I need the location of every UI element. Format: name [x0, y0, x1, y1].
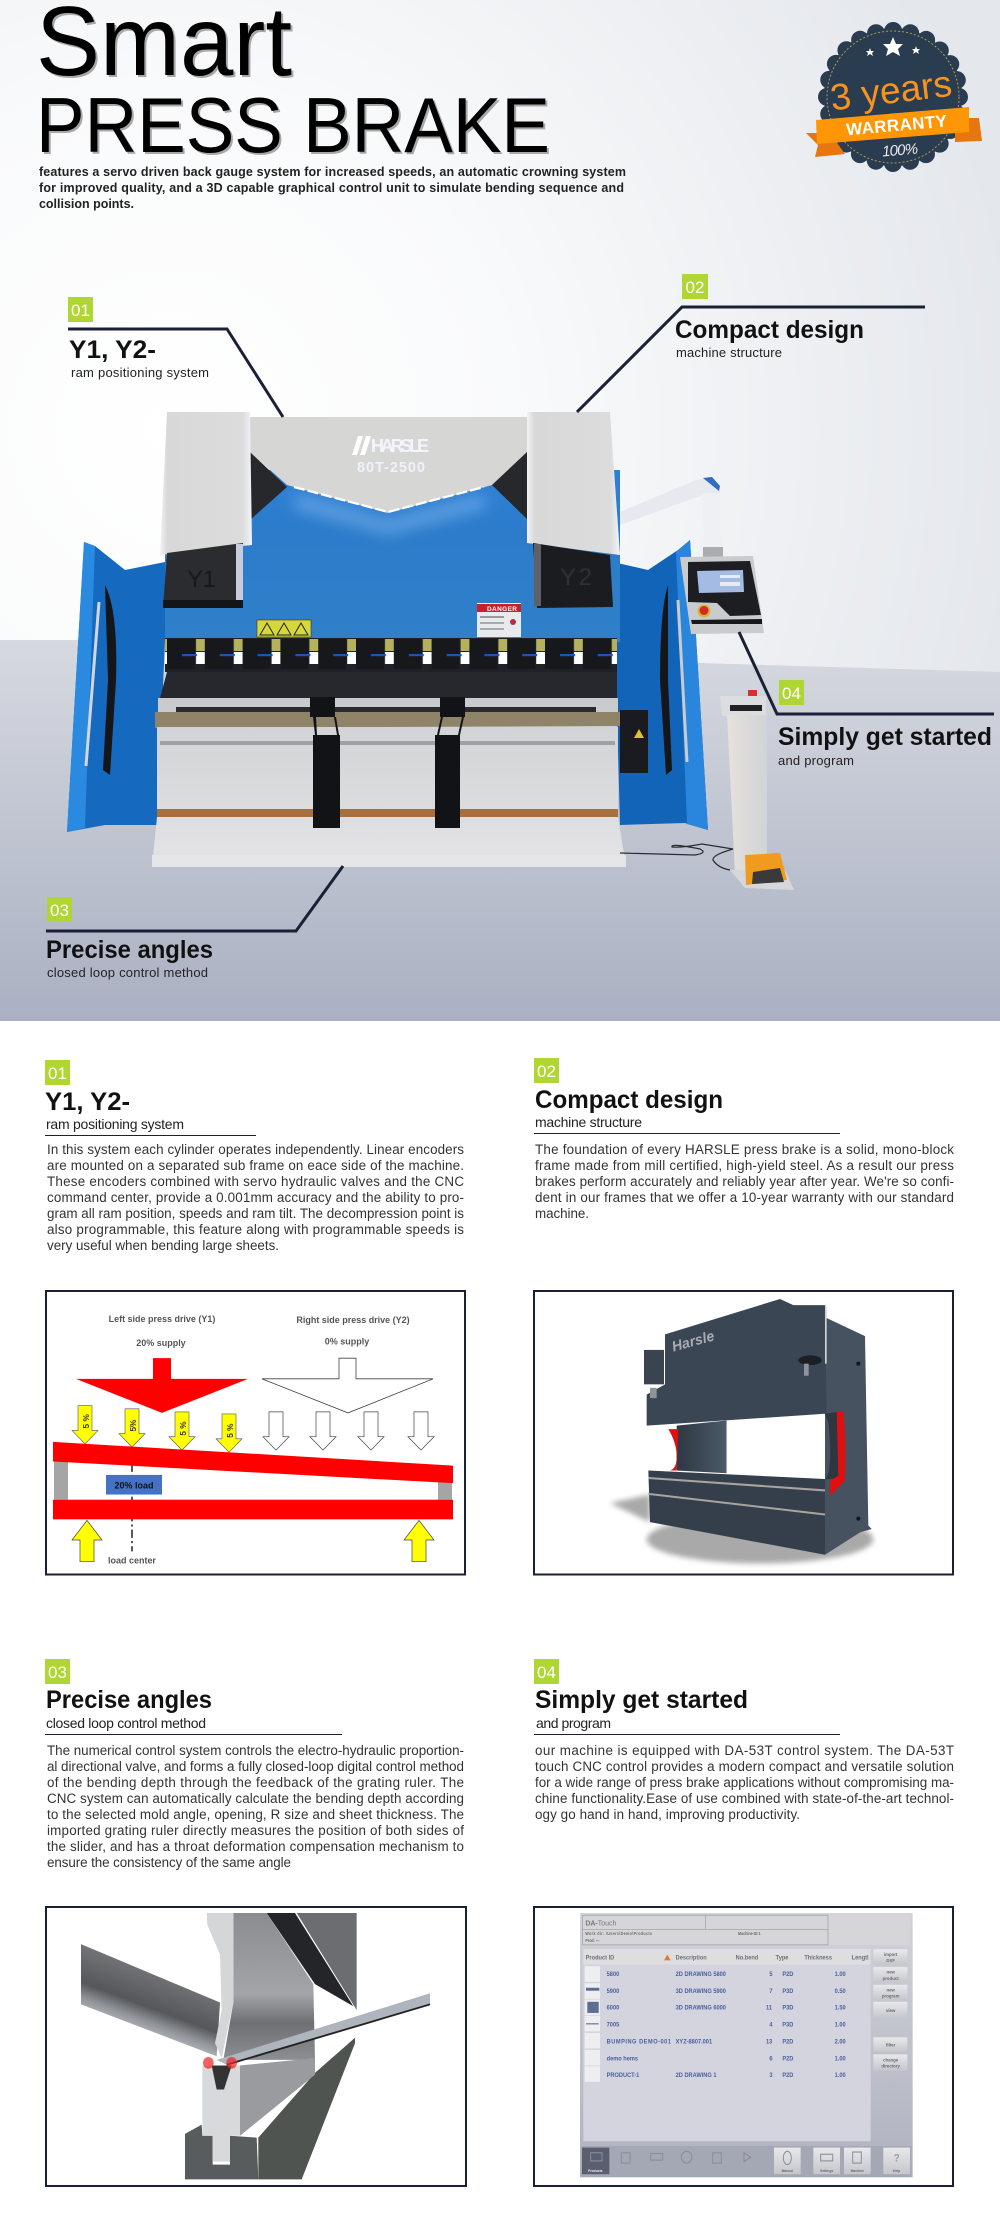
table rows: 6: [769, 2056, 773, 2062]
table rows: 0.50: [835, 1989, 846, 1995]
bottom tabs: Manual: [782, 2169, 793, 2173]
section body 04: for a wide range of press brake applications without compromising ma-: [535, 1775, 954, 1790]
section body 01: gram all ram position, speeds and ram tilt. The decompression point is: [47, 1206, 464, 1221]
section body 04: [535, 1743, 954, 1822]
screen header: Work dir: \Users\Demo\Products: [585, 1931, 652, 1936]
light edge: [825, 1305, 827, 1364]
section number 01: 01: [48, 1064, 67, 1083]
Y2 block: [533, 543, 613, 608]
section body 03: [47, 1743, 464, 1870]
pedal cable: [620, 844, 733, 870]
callout number 01: 01: [71, 301, 90, 320]
load tag: 20% load: [115, 1480, 153, 1490]
side plate: [825, 1317, 872, 1555]
section body 03: ensure the consistency of the same angle: [47, 1855, 291, 1870]
table rows: P2D: [782, 2073, 794, 2079]
callout line 01: [68, 329, 283, 417]
callout number 02: 02: [686, 278, 704, 297]
floor: [0, 640, 1000, 1021]
table rows: P3D: [782, 2005, 794, 2012]
screen body: [580, 1913, 913, 2177]
top beam: [250, 417, 528, 513]
table rows: demo hems: [607, 2056, 639, 2062]
table rows: 4: [769, 2022, 773, 2029]
table rows: 2D DRAWING 5800: [676, 1972, 727, 1978]
press brake machine: [67, 412, 794, 890]
clamp right: [435, 697, 465, 828]
percent labels: 5 %: [226, 1423, 235, 1438]
stop rod: [160, 741, 615, 745]
die notch: [212, 2065, 232, 2090]
intro text: [39, 165, 626, 211]
callout title 03: Precise angles: [46, 936, 213, 964]
callout line 03: [46, 866, 343, 931]
section number 03: 03: [48, 1663, 67, 1682]
lower red beam: [53, 1500, 453, 1519]
intro text: collision points.: [39, 197, 134, 211]
upper beam lower: [160, 672, 617, 698]
section body 01: [47, 1142, 464, 1253]
left column cover: [160, 412, 252, 555]
table rows: 13: [766, 2039, 773, 2045]
section subtitle 03: closed loop control method: [46, 1715, 206, 1731]
table rows: 7005: [607, 2022, 620, 2029]
danger sticker: DANGER: [487, 606, 517, 613]
table rows: 1.00: [835, 2022, 846, 2029]
white supply arrow: [262, 1358, 433, 1413]
side buttons: import: [884, 1952, 898, 1957]
picture: machine frame: [534, 1291, 953, 1574]
bottom tabs: Help: [893, 2169, 900, 2173]
table rows: 5900: [607, 1989, 620, 1995]
back plate: [297, 1913, 357, 2010]
callout title 04: Simply get started: [778, 723, 992, 751]
screen header: Machine ID:1: [738, 1931, 761, 1936]
silver rail: [158, 698, 618, 712]
holder side: [258, 2038, 355, 2179]
blue back panel: [165, 470, 620, 642]
section body 02: The foundation of every HARSLE press brake is a solid, mono-block: [535, 1142, 954, 1157]
Y1 block: Y1: [187, 566, 216, 593]
bottom tabs: Settings: [820, 2169, 833, 2173]
callout 03: [46, 866, 343, 980]
callout sub 01: ram positioning system: [71, 365, 209, 380]
table header: [583, 1949, 871, 1964]
LED strip: [294, 487, 484, 512]
section subtitle 01: ram positioning system: [46, 1116, 184, 1132]
section body 01: are mounted on a separated sub frame on eace side of the machine.: [47, 1158, 464, 1173]
table rows: 3D DRAWING 5900: [676, 1989, 727, 1995]
load tag: [106, 1475, 162, 1495]
table header: Thickness: [804, 1955, 833, 1961]
section body 02: [535, 1142, 954, 1221]
table rows: P2D: [782, 2039, 794, 2045]
table rows: 1.00: [835, 1972, 846, 1978]
right red edge: [830, 1412, 845, 1496]
side buttons: filter: [886, 2042, 896, 2048]
side buttons: [873, 1949, 907, 2071]
rear column: [677, 1421, 727, 1473]
beam logo: HARSLE: [371, 436, 429, 456]
section body 03: CNC system can automatically calculate the bending depth according: [47, 1791, 464, 1806]
side buttons: new: [886, 1987, 895, 1993]
table rows: [585, 1966, 846, 2082]
contact points: [203, 2057, 237, 2069]
table rows: P2D: [782, 2056, 794, 2062]
copper strip: [157, 809, 618, 817]
section body 02: brakes perform accurately and reliably year after year. We're so confi-: [535, 1174, 954, 1189]
table rows: 7: [769, 1989, 773, 1995]
table rows: BUMPING DEMO-001: [607, 2039, 672, 2045]
section subtitle 04: and program: [536, 1715, 611, 1731]
side buttons: program: [882, 1994, 899, 1999]
side buttons: new: [886, 1970, 895, 1975]
section body 01: command center, provide a 0.001mm accuracy and the ability to pro-: [47, 1190, 464, 1205]
percent labels: [82, 1413, 235, 1438]
callout sub 04: and program: [778, 753, 854, 768]
table header: Lengtl: [852, 1955, 869, 1961]
section body 04: chine functionality.Ease of use combined with state-of-the-art technol-: [535, 1791, 954, 1806]
ribbon: [816, 107, 969, 144]
section number 02: 02: [537, 1062, 556, 1081]
badge stars: [866, 37, 920, 56]
section body 02: machine.: [535, 1206, 589, 1221]
table rows: 11: [766, 2005, 773, 2012]
picture: bending tool: [46, 1907, 466, 2186]
Y2 block: Y2: [560, 564, 592, 591]
table rows: 1.50: [835, 2005, 846, 2012]
badge years text: 3 years: [828, 63, 954, 118]
section number 01: [45, 1060, 70, 1085]
bottom tabs: Machine: [851, 2169, 864, 2173]
callout 04: [739, 632, 994, 768]
drive labels: Left side press drive (Y1): [109, 1314, 215, 1324]
warning sticker: [257, 620, 311, 637]
callout sub 03: closed loop control method: [47, 965, 208, 980]
grey cylinders: [54, 1461, 452, 1500]
yellow load arrows: [72, 1406, 242, 1452]
callout title 01: Y1, Y2-: [69, 336, 156, 364]
section body 03: to the selected mold angle, opening, R size and sheet thickness. The: [47, 1807, 464, 1822]
punch side: [223, 1913, 315, 2060]
picture: control screen: [534, 1907, 953, 2186]
section subtitle 02: machine structure: [535, 1114, 642, 1130]
red supply arrow: [76, 1358, 248, 1413]
plate grooves: [648, 1478, 825, 1515]
side buttons: DXF: [886, 1958, 895, 1963]
main title: [36, 0, 550, 169]
section body 04: touch CNC control provides a modern compact and versatile solution: [535, 1759, 954, 1774]
callout number 02: [682, 274, 708, 299]
table rows: PRODUCT-1: [607, 2073, 640, 2079]
beam logo: [352, 436, 429, 476]
bottom tabs: [581, 2146, 911, 2177]
section title 03: Precise angles: [46, 1686, 212, 1714]
callout number 04: [779, 680, 804, 705]
section body 02: dent in our frames that we offer a 10-year warranty with our standard: [535, 1190, 954, 1205]
callout number 03: 03: [50, 901, 69, 920]
drive labels: 20% supply: [136, 1338, 187, 1348]
LED glow: [295, 496, 485, 532]
section body 03: al directional valve, and forms a fully closed-loop digital control method: [47, 1759, 464, 1774]
left cylinder: [644, 1350, 664, 1384]
table header: Description: [676, 1955, 707, 1961]
section body 01: In this system each cylinder operates independently. Linear encoders: [47, 1142, 464, 1157]
screen header: Prod: ---: [585, 1938, 600, 1943]
section body 03: the slider, and has a throat deformation compensation mechanism to: [47, 1839, 464, 1854]
Y1 block: [163, 543, 243, 608]
left sheet: [81, 1944, 220, 2056]
section number 03: [45, 1659, 70, 1684]
table rows: 5: [769, 1972, 773, 1978]
table rows: 3D DRAWING 6000: [676, 2005, 727, 2012]
load center label: load center: [108, 1556, 156, 1566]
foot pedestal: [720, 690, 794, 890]
table rows: 5800: [607, 1972, 620, 1978]
foot pedal: [745, 853, 787, 885]
badge seal: [824, 28, 962, 166]
section number 04: 04: [537, 1663, 556, 1682]
die side: [240, 2058, 315, 2136]
intro text: for improved quality, and a 3D capable graphical control unit to simulate bending sequence and: [39, 181, 624, 195]
section title 02: Compact design: [535, 1086, 723, 1114]
ribbon text: WARRANTY: [845, 112, 948, 139]
main title: PRESS BRAKE: [36, 81, 550, 169]
section 04: [534, 1659, 954, 2186]
section body 04: ogy go hand in hand, improving productivity.: [535, 1807, 800, 1822]
danger sticker: [477, 603, 521, 637]
section number 02: [534, 1058, 559, 1083]
diagram: press drive load: [46, 1291, 465, 1574]
drive labels: 0% supply: [325, 1337, 370, 1347]
table rows: 1.00: [835, 2056, 846, 2062]
load center line: [131, 1464, 133, 1551]
percent labels: 5%: [129, 1419, 138, 1432]
table rows: 2D DRAWING 1: [676, 2073, 717, 2079]
right door: [613, 540, 708, 830]
section body 01: also programmable, this feature along with programmable speeds is: [47, 1222, 464, 1237]
section body 03: imported grating ruler directly measures the position of both sides of: [47, 1823, 464, 1838]
white bed: [152, 727, 626, 867]
table header: No.bend: [736, 1955, 759, 1961]
punch front: [207, 1913, 233, 2058]
white load arrows: [263, 1412, 434, 1450]
drive labels: [109, 1314, 410, 1348]
callout number 01: [68, 297, 93, 322]
section 03: [45, 1659, 466, 2186]
section number 04: [534, 1659, 559, 1684]
die front: [202, 2065, 240, 2162]
section body 01: These encoders combined with servo hydraulic valves and the CNC: [47, 1174, 464, 1189]
percent labels: 5 %: [179, 1421, 188, 1436]
side buttons: directory: [881, 2063, 900, 2069]
throat opening: [727, 1414, 825, 1479]
side buttons: view: [886, 2008, 896, 2013]
side holes: [856, 1362, 860, 1521]
bed bottom highlight: [152, 855, 626, 867]
section body 02: frame made from mill certified, high-yield steel. As a result our press: [535, 1158, 954, 1173]
right sheet: [217, 1993, 430, 2065]
section body 03: of the bending depth through the feedback of the grating ruler. The: [47, 1775, 464, 1790]
holder front: [185, 2125, 258, 2179]
section body 01: very useful when bending large sheets.: [47, 1238, 279, 1253]
upper plate: [647, 1299, 827, 1426]
callout line 02: [577, 307, 925, 412]
callout number 04: 04: [782, 684, 801, 703]
table rows: 3: [769, 2073, 773, 2079]
section title 04: Simply get started: [535, 1686, 748, 1714]
table rows: P3D: [782, 1989, 794, 1995]
upper red beam: [53, 1442, 453, 1483]
table rows: XYZ-8807.001: [676, 2039, 713, 2045]
table rows: P2D: [782, 1972, 794, 1978]
section body 03: The numerical control system controls the electro-hydraulic proportion-: [47, 1743, 464, 1758]
plate logo: Harsle: [670, 1328, 716, 1356]
section body 04: our machine is equipped with DA-53T control system. The DA-53T: [535, 1743, 954, 1758]
table area: [583, 1949, 871, 2141]
beam logo: 80T-2500: [357, 460, 425, 476]
frame shadow: [610, 1495, 873, 1563]
dark wedges: [250, 452, 528, 520]
callout title 02: Compact design: [675, 316, 864, 344]
wall background: [0, 0, 1000, 1021]
screen header: [583, 1915, 910, 1945]
intro text: features a servo driven back gauge system for increased speeds, an automatic crowning system: [39, 165, 626, 179]
table header: Product ID: [586, 1955, 615, 1961]
table rows: 6000: [607, 2005, 620, 2012]
left door: [67, 542, 165, 832]
bottom tabs: ?: [894, 2152, 900, 2165]
drive labels: Right side press drive (Y2): [296, 1315, 410, 1325]
badge percent: 100%: [881, 140, 919, 161]
section 01: [45, 1060, 465, 1574]
percent labels: 5 %: [82, 1413, 91, 1428]
hero panel: [0, 0, 1000, 1021]
dark strip: [267, 1913, 353, 2006]
callout sub 02: machine structure: [676, 345, 782, 360]
lower right box: [620, 710, 648, 773]
side buttons: product: [883, 1976, 899, 1981]
control panel: [680, 556, 764, 634]
clamp left: [310, 697, 340, 828]
callout line 04: [739, 632, 994, 714]
monitor arm: [620, 477, 723, 557]
table rows: 2.00: [835, 2039, 846, 2045]
ribbon tails: [806, 118, 982, 157]
table header: Type: [776, 1955, 789, 1961]
adjusters: [650, 1355, 822, 1398]
section 02: [534, 1058, 954, 1574]
table rows: 1.00: [835, 2073, 846, 2079]
callout 02: [577, 274, 925, 412]
bottom tabs: Products: [588, 2169, 603, 2173]
table rows: P3D: [782, 2022, 794, 2029]
lower plate: [648, 1470, 825, 1555]
section title 01: Y1, Y2-: [45, 1088, 130, 1116]
warranty badge: [806, 28, 982, 166]
screen header: DA-Touch: [585, 1918, 616, 1928]
right column cover: [527, 412, 620, 555]
callout 01: [68, 297, 283, 417]
tool clamps band: [165, 638, 617, 672]
yellow reaction arrows: [72, 1520, 434, 1562]
callout number 03: [47, 897, 72, 922]
right column curve: [825, 1412, 838, 1479]
side buttons: change: [883, 2057, 899, 2062]
left red edge: [668, 1429, 678, 1470]
bronze rail: [155, 712, 622, 728]
